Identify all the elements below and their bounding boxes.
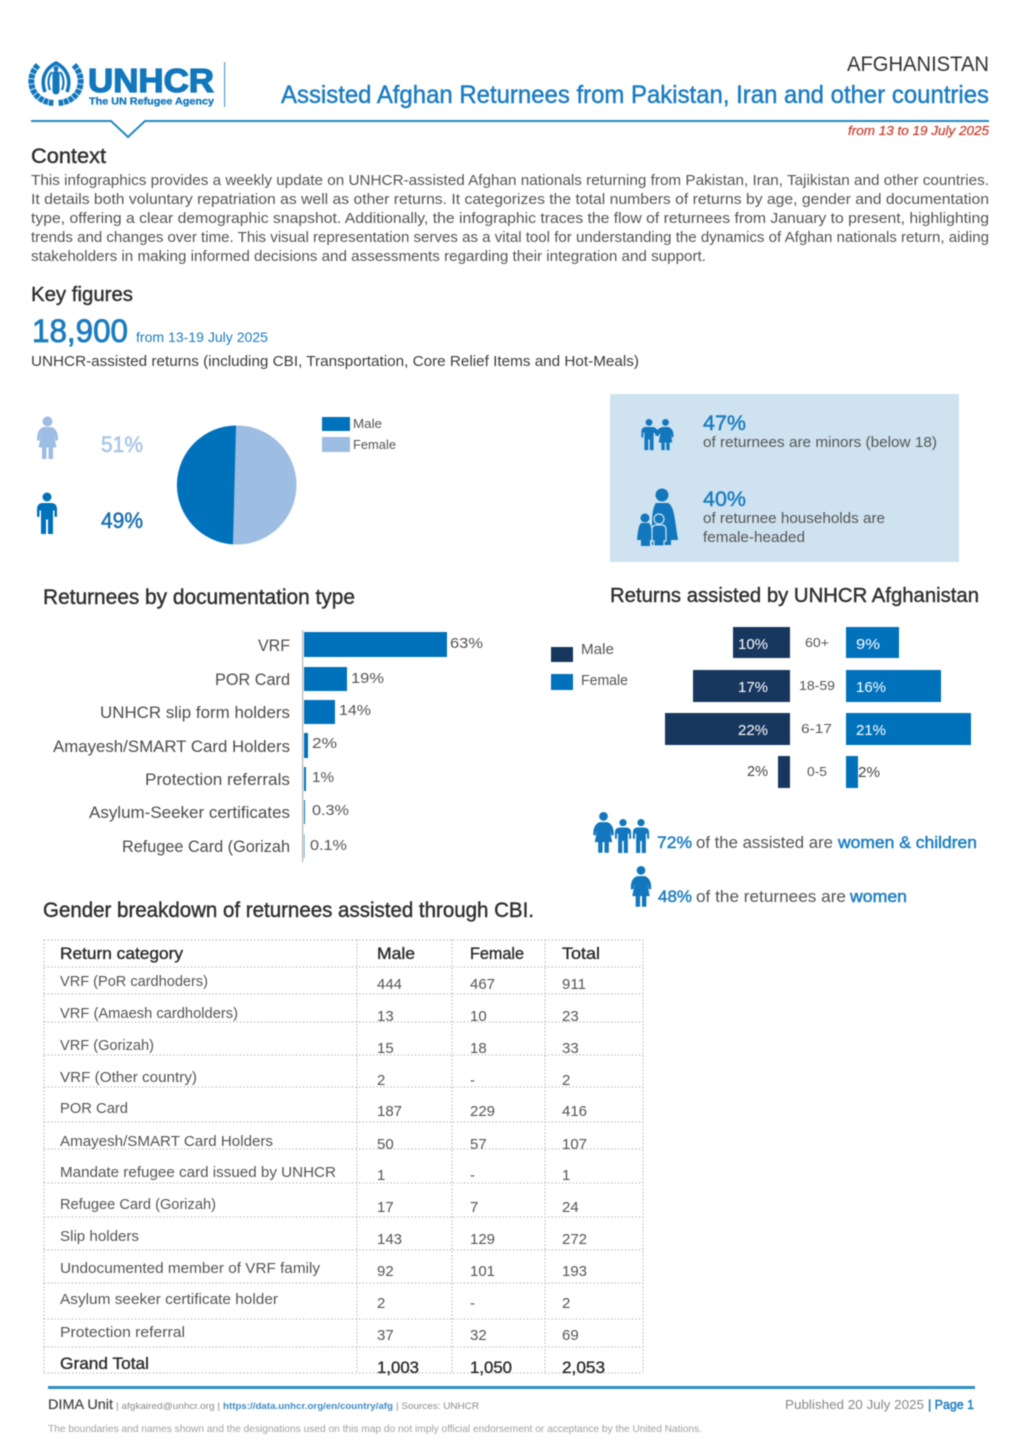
female column: - bbox=[470, 1295, 475, 1312]
female column bbox=[470, 976, 512, 1377]
pyramid legend: Male bbox=[581, 642, 614, 658]
pyramid legend bbox=[551, 642, 628, 690]
population pyramid: returns assisted by UNHCR Afghanistan bbox=[551, 584, 979, 788]
icon: children bbox=[641, 419, 674, 450]
table row labels: Grand Total bbox=[60, 1355, 149, 1373]
callout: women bbox=[631, 866, 907, 907]
category labels: Amayesh/SMART Card Holders bbox=[53, 738, 290, 756]
icon: woman bbox=[37, 416, 58, 459]
total column bbox=[562, 976, 605, 1377]
table header row bbox=[60, 945, 600, 963]
female column: 129 bbox=[470, 1231, 495, 1248]
key figures bbox=[31, 284, 639, 370]
context paragraph: trends and changes over time. This visual representation serves as a vital tool for understanding the dynamics of Afghan nationals return, aiding bbox=[31, 230, 989, 246]
footer unit: DIMA Unit bbox=[48, 1396, 113, 1412]
pie chart bbox=[177, 426, 296, 544]
callout text: 72% bbox=[657, 834, 692, 852]
male column: 17 bbox=[377, 1199, 394, 1216]
female-headed description bbox=[703, 511, 885, 546]
male column: 92 bbox=[377, 1263, 394, 1280]
headline description: UNHCR-assisted returns (including CBI, Transportation, Core Relief Items and Hot-Meals) bbox=[31, 353, 639, 370]
total column: 33 bbox=[562, 1040, 579, 1057]
header rule with chevron bbox=[31, 121, 989, 137]
female column: 32 bbox=[470, 1327, 487, 1344]
footer contact and sources: | afgkaired@unhcr.org | bbox=[116, 1401, 220, 1412]
context paragraph: It details both voluntary repatriation as well as other returns. It categorizes the total numbers of returns by age, gender and documentation bbox=[31, 192, 989, 208]
value labels: 63% bbox=[450, 635, 483, 652]
callout text: of the returnees are bbox=[696, 888, 846, 906]
age labels: 18-59 bbox=[799, 678, 835, 693]
table row labels: Refugee Card (Gorizah) bbox=[60, 1196, 216, 1213]
footer contact and sources: https://data.unhcr.org/en/country/afg bbox=[223, 1401, 393, 1412]
female bars bbox=[846, 627, 971, 788]
total column: 23 bbox=[562, 1008, 579, 1025]
male column: 1 bbox=[377, 1167, 385, 1184]
minors percentage: 47% bbox=[703, 412, 746, 435]
male column: 15 bbox=[377, 1040, 394, 1057]
category labels: UNHCR slip form holders bbox=[100, 704, 290, 722]
headline number: 18,900 bbox=[32, 313, 128, 349]
male column: 187 bbox=[377, 1103, 402, 1120]
female column: 7 bbox=[470, 1199, 478, 1216]
footer bbox=[48, 1386, 975, 1435]
chart heading: Returnees by documentation type bbox=[43, 586, 355, 609]
context section bbox=[31, 145, 989, 265]
table row labels: VRF (Amaesh cardholders) bbox=[60, 1005, 238, 1022]
male bars bbox=[665, 627, 790, 788]
female column: - bbox=[470, 1167, 475, 1184]
pyramid legend: Female bbox=[581, 673, 628, 689]
table header row: Return category bbox=[60, 945, 184, 963]
minors description: of returnees are minors (below 18) bbox=[703, 435, 937, 451]
context paragraph: This infographics provides a weekly update on UNHCR-assisted Afghan nationals returning from Pakistan, Iran, Tajikistan and other countries. bbox=[31, 173, 989, 189]
table row labels: Undocumented member of VRF family bbox=[60, 1260, 320, 1277]
total column: 2,053 bbox=[562, 1359, 605, 1377]
callout text bbox=[657, 834, 977, 852]
header bbox=[31, 53, 990, 138]
category labels: VRF bbox=[258, 637, 290, 655]
female column: 57 bbox=[470, 1136, 487, 1153]
table row labels: Amayesh/SMART Card Holders bbox=[60, 1133, 273, 1150]
total column: 24 bbox=[562, 1199, 579, 1216]
pyramid values: 10% bbox=[738, 636, 768, 653]
table row labels: Asylum seeker certificate holder bbox=[60, 1291, 278, 1308]
table row labels: Protection referral bbox=[60, 1324, 185, 1341]
callout text: 48% bbox=[658, 888, 692, 906]
female percentage: 51% bbox=[101, 432, 143, 457]
total column: 911 bbox=[562, 976, 586, 993]
pyramid values: 17% bbox=[738, 679, 768, 696]
category labels: Refugee Card (Gorizah bbox=[122, 838, 290, 856]
female column: 18 bbox=[470, 1040, 487, 1057]
table row labels: POR Card bbox=[60, 1100, 128, 1117]
title: Assisted Afghan Returnees from Pakistan, Iran and other countries bbox=[281, 81, 989, 109]
table row labels: VRF (Gorizah) bbox=[60, 1037, 154, 1054]
value labels: 0.1% bbox=[310, 837, 347, 854]
male column: 444 bbox=[377, 976, 402, 993]
male column bbox=[377, 976, 419, 1377]
pyramid values: 2% bbox=[858, 764, 880, 781]
table row labels: VRF (Other country) bbox=[60, 1069, 197, 1086]
total column: 107 bbox=[562, 1136, 587, 1153]
total column: 1 bbox=[562, 1167, 570, 1184]
category labels: Protection referrals bbox=[145, 771, 290, 789]
pie legend: Female bbox=[353, 437, 396, 452]
pie legend bbox=[322, 416, 396, 452]
male column: 13 bbox=[377, 1008, 394, 1025]
value labels: 2% bbox=[312, 735, 337, 752]
pyramid values bbox=[738, 636, 886, 781]
footer publication date and page: Published 20 July 2025 bbox=[785, 1397, 924, 1412]
footer contact and sources bbox=[116, 1401, 479, 1412]
pyramid values: 16% bbox=[856, 679, 886, 696]
male column: 2 bbox=[377, 1295, 385, 1312]
male percentage: 49% bbox=[101, 508, 143, 533]
female-headed percentage: 40% bbox=[703, 488, 746, 511]
callout text: women & children bbox=[837, 834, 977, 852]
male column: 143 bbox=[377, 1231, 402, 1248]
wordmark: UNHCR bbox=[88, 62, 214, 99]
pyramid values: 22% bbox=[738, 722, 768, 739]
female column: 101 bbox=[470, 1263, 495, 1280]
icon: family bbox=[637, 488, 678, 546]
tagline: The UN Refugee Agency bbox=[89, 96, 214, 108]
male column: 1,003 bbox=[377, 1359, 419, 1377]
icon: woman and two children bbox=[593, 812, 649, 853]
context paragraph bbox=[31, 173, 989, 265]
value labels: 1% bbox=[312, 769, 334, 786]
female-headed description: of returnee households are bbox=[703, 511, 885, 527]
table header row: Male bbox=[377, 945, 415, 963]
context paragraph: stakeholders in making informed decisions and assessments regarding their integration and support. bbox=[31, 249, 706, 265]
age labels: 6-17 bbox=[801, 721, 832, 736]
female column: 1,050 bbox=[470, 1359, 512, 1377]
total column: 193 bbox=[562, 1263, 587, 1280]
footer publication date and page: | Page 1 bbox=[928, 1397, 974, 1412]
value labels: 14% bbox=[339, 702, 371, 719]
age labels: 60+ bbox=[805, 635, 829, 650]
country label: AFGHANISTAN bbox=[847, 53, 989, 76]
table row labels bbox=[60, 973, 336, 1373]
category labels: Asylum-Seeker certificates bbox=[89, 804, 290, 822]
icon: man bbox=[37, 492, 57, 534]
male column: 50 bbox=[377, 1136, 394, 1153]
panel: minors and female-headed households bbox=[610, 394, 959, 562]
value labels: 19% bbox=[351, 670, 384, 687]
value labels: 0.3% bbox=[312, 802, 349, 819]
age labels bbox=[799, 635, 835, 779]
callout text bbox=[658, 888, 907, 906]
female column: 10 bbox=[470, 1008, 487, 1025]
bar chart: returnees by documentation type bbox=[43, 586, 483, 862]
table heading: Gender breakdown of returnees assisted through CBI. bbox=[43, 899, 534, 922]
callout text: women bbox=[849, 888, 907, 906]
table header row: Total bbox=[562, 945, 600, 963]
pyramid values: 21% bbox=[856, 722, 886, 739]
female column: - bbox=[470, 1072, 475, 1089]
total column: 69 bbox=[562, 1327, 579, 1344]
table header row: Female bbox=[470, 945, 524, 963]
pyramid values: 9% bbox=[856, 636, 880, 653]
context paragraph: type, offering a clear demographic snapshot. Additionally, the infographic traces the flow of returnees from January to present, highlighting bbox=[31, 211, 989, 227]
category labels bbox=[53, 637, 290, 856]
icon: UNHCR emblem bbox=[31, 63, 81, 103]
pyramid values: 2% bbox=[747, 763, 768, 780]
headline period: from 13-19 July 2025 bbox=[136, 329, 268, 345]
footer contact and sources: | Sources: UNHCR bbox=[396, 1401, 479, 1412]
key figures heading: Key figures bbox=[31, 284, 133, 306]
callout text: of the assisted are bbox=[696, 834, 833, 852]
table row labels: Slip holders bbox=[60, 1228, 139, 1245]
callout: women and children bbox=[593, 812, 977, 853]
icon: woman bbox=[631, 866, 651, 907]
total column: 2 bbox=[562, 1072, 570, 1089]
female column: 229 bbox=[470, 1103, 495, 1120]
table row labels: VRF (PoR cardhoders) bbox=[60, 973, 208, 990]
table bbox=[44, 940, 643, 1377]
pyramid heading: Returns assisted by UNHCR Afghanistan bbox=[610, 584, 979, 607]
category labels: POR Card bbox=[215, 671, 290, 689]
total column: 272 bbox=[562, 1231, 587, 1248]
footer disclaimer: The boundaries and names shown and the designations used on this map do not imply official endorsement or acceptance by the United Nations. bbox=[48, 1423, 702, 1435]
male column: 37 bbox=[377, 1327, 394, 1344]
table section: gender breakdown bbox=[43, 899, 643, 1377]
male column: 2 bbox=[377, 1072, 385, 1089]
bars bbox=[304, 632, 447, 858]
gender split bbox=[37, 416, 396, 544]
female column: 467 bbox=[470, 976, 495, 993]
table row labels: Mandate refugee card issued by UNHCR bbox=[60, 1164, 336, 1181]
total column: 2 bbox=[562, 1295, 570, 1312]
total column: 416 bbox=[562, 1103, 587, 1120]
female-headed description: female-headed bbox=[703, 530, 805, 546]
age labels: 0-5 bbox=[807, 764, 827, 779]
logo: UNHCR bbox=[31, 62, 225, 108]
context heading: Context bbox=[31, 145, 106, 168]
pie legend: Male bbox=[353, 416, 382, 431]
date range: from 13 to 19 July 2025 bbox=[848, 123, 990, 138]
value labels bbox=[310, 635, 483, 854]
